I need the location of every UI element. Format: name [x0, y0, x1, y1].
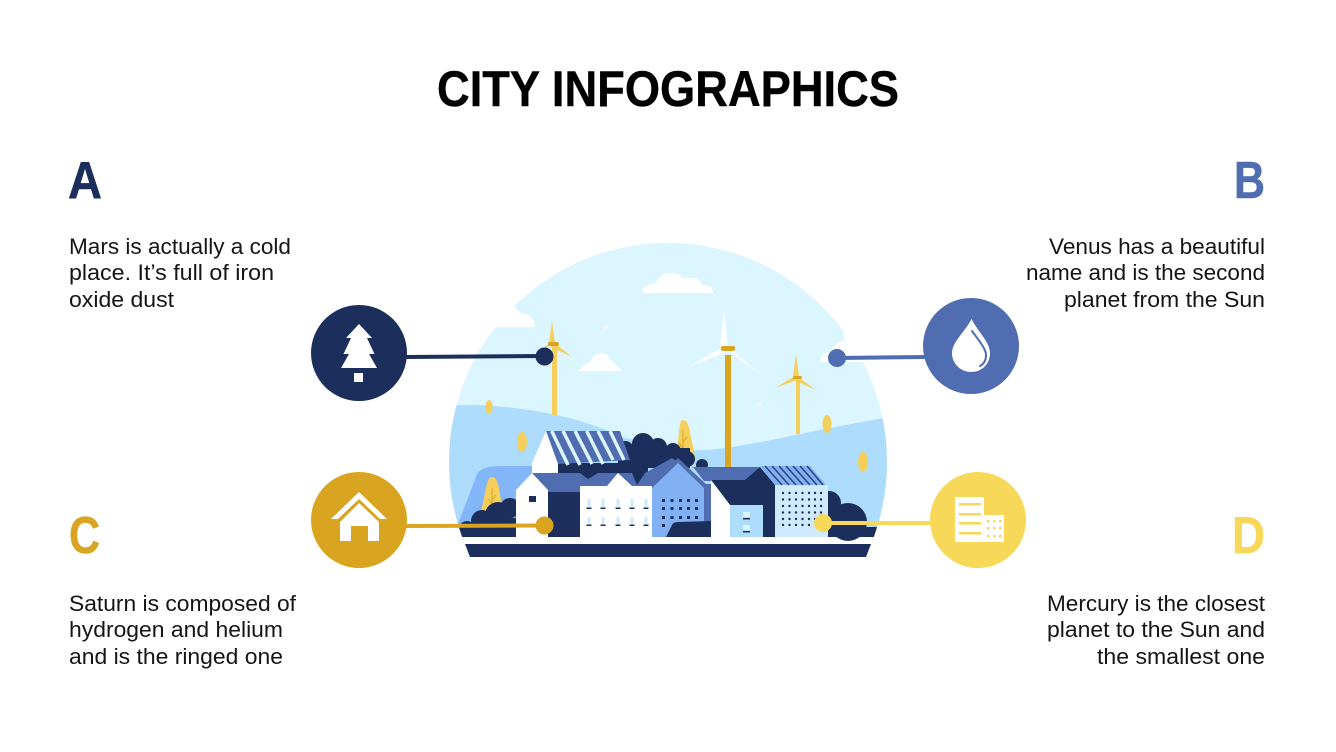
- letter B: B: [1234, 152, 1265, 210]
- text A: oxide dust: [69, 287, 175, 312]
- text C: and is the ringed one: [69, 644, 283, 669]
- section D: [814, 472, 1266, 669]
- letter C: C: [69, 507, 100, 565]
- section C: [69, 472, 554, 669]
- sky dome: [440, 240, 896, 537]
- letter D: D: [1232, 507, 1265, 565]
- section A: [68, 152, 554, 401]
- icon: tree: [311, 305, 407, 401]
- icon: house: [311, 472, 407, 568]
- text B: name and is the second: [1026, 260, 1265, 285]
- right bush: [828, 491, 878, 541]
- wind turbine small right: [775, 354, 816, 434]
- roof band right: [693, 467, 760, 481]
- solar roof house: [532, 431, 648, 493]
- white house left: [516, 473, 548, 537]
- icon: buildings: [930, 472, 1026, 568]
- mid hill: [458, 466, 540, 537]
- clouds: [488, 273, 890, 407]
- text D: Mercury is the closest: [1047, 591, 1266, 616]
- text B: [1026, 234, 1265, 312]
- white terrace building: [580, 473, 652, 537]
- title: CITY INFOGRAPHICS: [437, 61, 899, 117]
- text A: Mars is actually a cold: [69, 234, 291, 259]
- section B: [828, 152, 1265, 394]
- dark gabled house: [711, 467, 775, 537]
- dotted building with solar roof: [760, 466, 828, 537]
- text D: the smallest one: [1097, 644, 1265, 669]
- text A: [69, 234, 291, 312]
- dark block: [548, 492, 580, 537]
- connector A: [405, 348, 554, 366]
- text B: planet from the Sun: [1064, 287, 1265, 312]
- connector B: [828, 349, 927, 367]
- icon: water drop: [923, 298, 1019, 394]
- city illustration: [440, 240, 896, 557]
- ground platform: [465, 544, 871, 557]
- connector C: [405, 516, 554, 534]
- small yellow trees: [481, 400, 868, 512]
- text D: [1047, 591, 1266, 669]
- left bush: [458, 498, 520, 537]
- letter A: A: [68, 152, 102, 210]
- text C: [69, 591, 297, 669]
- blue house: [652, 458, 711, 537]
- back bushes: [616, 433, 708, 471]
- text C: hydrogen and helium: [69, 617, 283, 642]
- connector D: [814, 514, 934, 532]
- text B: Venus has a beautiful: [1049, 234, 1265, 259]
- text D: planet to the Sun and: [1047, 617, 1265, 642]
- wind turbine large centre: [688, 310, 757, 468]
- text A: place. It’s full of iron: [69, 260, 274, 285]
- blue roof band: [532, 458, 690, 500]
- back hills: [440, 405, 890, 537]
- text C: Saturn is composed of: [69, 591, 297, 616]
- wind turbine small left: [543, 321, 572, 415]
